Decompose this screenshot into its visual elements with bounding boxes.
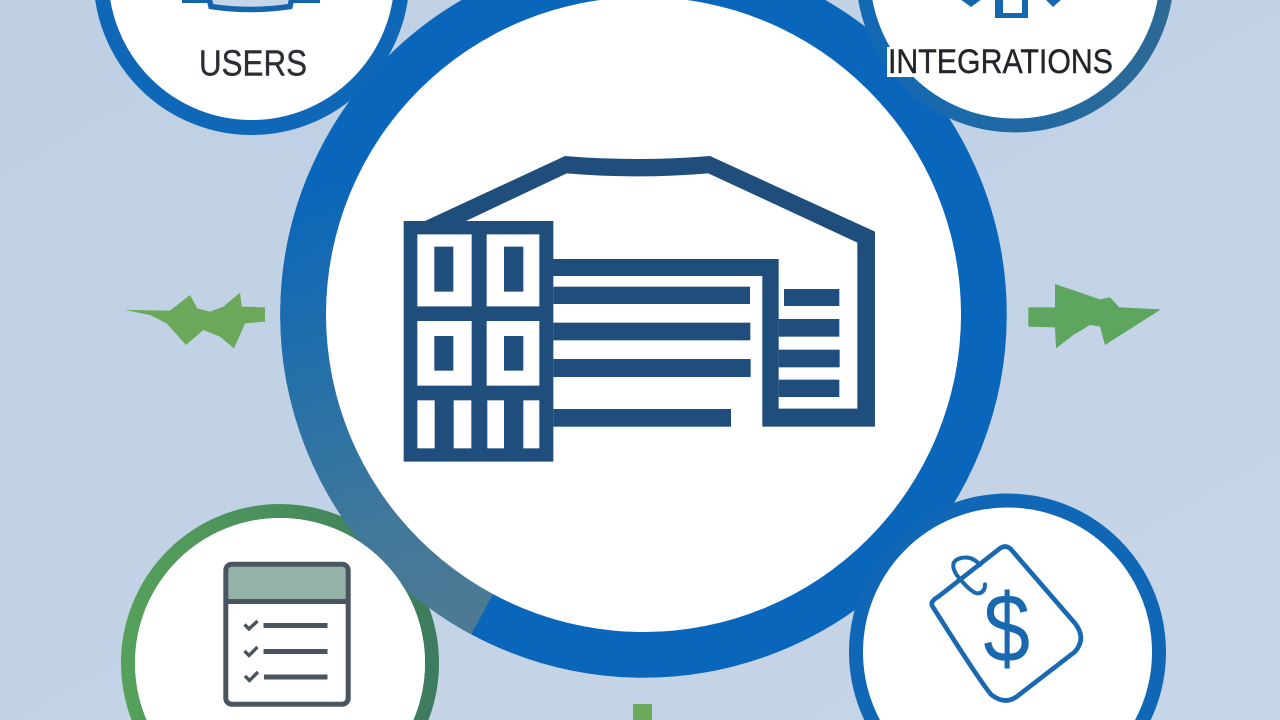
- node: checklist: [135, 518, 425, 720]
- label backing patch: [887, 47, 913, 77]
- dollar sign: $: [983, 573, 1030, 682]
- arrow: right: [1028, 284, 1161, 348]
- icon: warehouse building: [404, 156, 875, 462]
- icon: checklist: [225, 564, 349, 704]
- node: users: [101, 0, 402, 128]
- label: users: USERS: [199, 42, 307, 84]
- arrow: bottom: [633, 704, 652, 720]
- icon: users: [182, 0, 320, 10]
- bottom-left node ring: [128, 511, 432, 720]
- node: pricing: [856, 500, 1159, 720]
- arrow: left: [125, 293, 265, 348]
- label: integrations: INTEGRATIONS: [888, 43, 1113, 81]
- central hub ring: [303, 0, 984, 655]
- icon: price tag: [932, 546, 1081, 700]
- icon: integrations gear: [960, 0, 1062, 18]
- node: integrations: [863, 0, 1167, 126]
